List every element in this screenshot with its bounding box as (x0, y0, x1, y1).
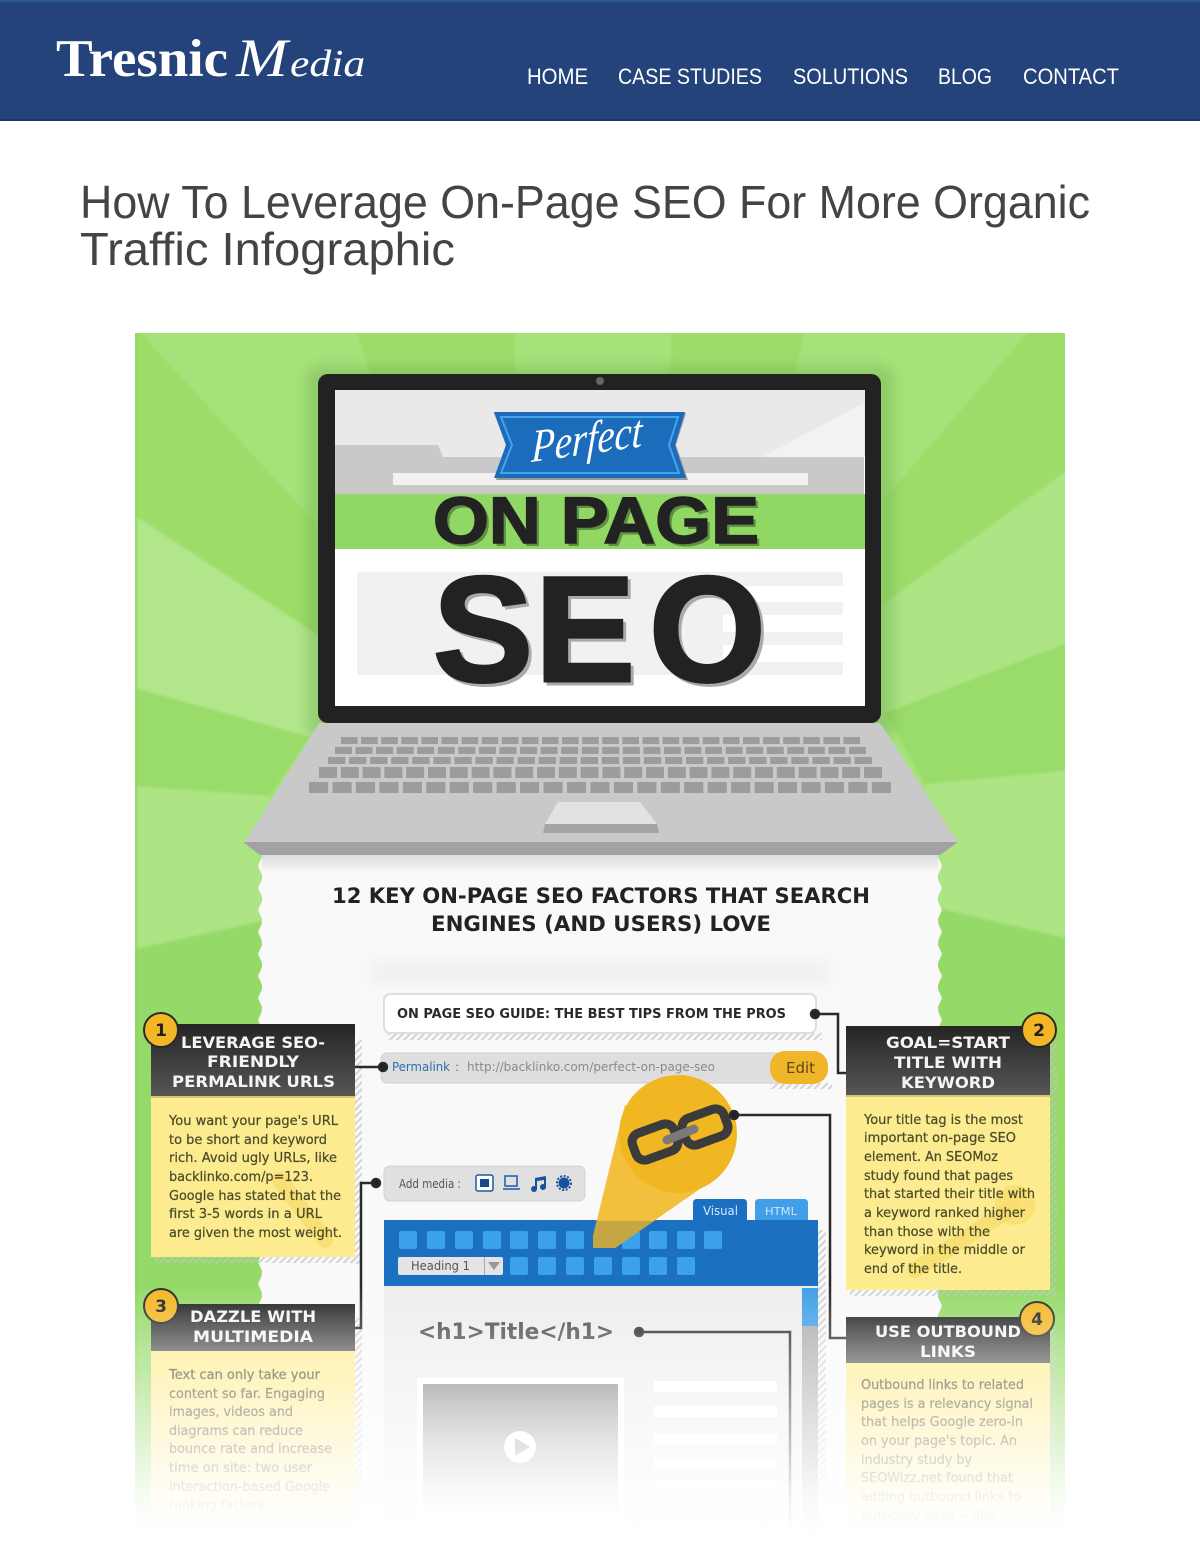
panel 3 body: Text can only take your (168, 1367, 320, 1383)
navigation menu (527, 64, 1119, 89)
ribbon: Perfect: Perfect (530, 406, 644, 473)
badge 1 (144, 1013, 178, 1047)
navigation menu: CONTACT (1023, 64, 1119, 89)
badge 3: 3 (155, 1297, 167, 1317)
bezel (318, 374, 881, 723)
panel 1 body (168, 1113, 342, 1241)
panel 4 body: industry study by (861, 1452, 972, 1468)
panel 3 body (168, 1367, 332, 1513)
page title: How To Leverage On-Page SEO For More Organic (80, 176, 1090, 228)
page title (80, 176, 1090, 275)
panel 4 body: authority sites -- like (861, 1508, 995, 1524)
editor tabs: HTML (765, 1205, 798, 1218)
laptop (243, 374, 958, 855)
panel 2 heading: KEYWORD (901, 1073, 995, 1092)
navigation menu: SOLUTIONS (793, 64, 908, 89)
panel 3 body: interaction-based Google (169, 1479, 330, 1495)
panel 2 body: Your title tag is the most (863, 1112, 1023, 1128)
toolbar buttons (399, 1231, 722, 1275)
edit button: Edit (786, 1059, 815, 1077)
heading: ON PAGE: ON PAGE (433, 483, 759, 557)
panel 4 heading (875, 1322, 1021, 1361)
panel 3 heading: MULTIMEDIA (193, 1327, 314, 1346)
connector lines (355, 1010, 846, 1540)
panel 1 body: are given the most weight. (169, 1225, 342, 1241)
screen (335, 390, 865, 706)
icon: image (476, 1175, 493, 1191)
panel 4 body (861, 1377, 1033, 1542)
panel 3 body: diagrams can reduce (169, 1423, 303, 1439)
panel 2: title keyword (846, 1013, 1056, 1290)
site header bar (0, 0, 1200, 121)
edit button (770, 1051, 828, 1084)
heading: ON PAGE: ON PAGE (436, 486, 762, 560)
logo: Media (235, 28, 365, 88)
permalink bar: : (455, 1060, 459, 1074)
panel 2 body: that started their title with (864, 1186, 1035, 1202)
panel 1 body: first 3-5 words in a URL (169, 1206, 322, 1222)
panel 2 body (863, 1112, 1035, 1277)
heading: ON PAGE (435, 496, 760, 546)
badge 2 (1022, 1013, 1056, 1047)
panel 1 heading: LEVERAGE SEO- (181, 1033, 325, 1052)
panel 3 heading: DAZZLE WITH (190, 1307, 316, 1326)
h1 sample: <h1>Title</h1> (418, 1320, 614, 1345)
infographic (135, 325, 1075, 1552)
navigation menu: CASE STUDIES (618, 64, 762, 89)
panel 2 body: study found that pages (864, 1168, 1013, 1184)
badge 4 (1020, 1302, 1054, 1336)
panel 4 body: Harvard.edu and (861, 1526, 968, 1542)
editor tabs (693, 1199, 808, 1221)
blog title field: ON PAGE SEO GUIDE: THE BEST TIPS FROM THE PROS (397, 1007, 786, 1022)
permalink bar: Permalink (392, 1060, 450, 1074)
bottom white fade (130, 1285, 1070, 1552)
hatch shadows (155, 1033, 1057, 1483)
badge 2: 2 (1033, 1021, 1045, 1041)
panel 1 body: rich. Avoid ugly URLs, like (169, 1150, 337, 1166)
panel 4 heading: LINKS (920, 1342, 976, 1361)
panel 2 body: end of the title. (864, 1261, 962, 1277)
panel 3 heading (190, 1307, 316, 1346)
panel 2 body: a keyword ranked higher (864, 1205, 1025, 1221)
panel 4 body: SEOWizz.net found that (861, 1470, 1013, 1486)
panel 4 body: pages is a relevancy signal (861, 1396, 1033, 1412)
subtitle (334, 887, 868, 934)
laptop shadow (306, 366, 894, 738)
subtitle: ENGINES (AND USERS) LOVE (431, 912, 771, 936)
navigation menu: BLOG (938, 64, 992, 89)
add media bar: Add media : (399, 1176, 461, 1191)
panel 2 body: keyword in the middle or (864, 1242, 1025, 1258)
add media bar (384, 1166, 585, 1201)
panel 3 body: time on site: two user (169, 1460, 312, 1476)
icon: music (531, 1176, 546, 1192)
panel 1 body: to be short and keyword (169, 1132, 327, 1148)
heading: SEO: SEO (433, 545, 766, 713)
logo (56, 28, 365, 88)
panel 4 body: that helps Google zero-in (861, 1414, 1023, 1430)
keyboard (309, 740, 891, 788)
icon: gear (557, 1176, 571, 1190)
video placeholder (417, 1378, 624, 1476)
trackpad (545, 802, 657, 824)
blog title field (384, 994, 816, 1033)
panel 3 body: bounce rate and increase (169, 1441, 332, 1457)
ribbon: Perfect (494, 406, 688, 480)
permalink bar (381, 1051, 828, 1084)
heading dropdown (398, 1257, 503, 1275)
panel 3 body: ranking factors. (169, 1497, 268, 1513)
panel 4 heading: USE OUTBOUND (875, 1322, 1021, 1341)
panel 2 body: element. An SEOMoz (864, 1149, 998, 1165)
panel 2 body: than those with the (864, 1224, 990, 1240)
panel 4: outbound links (846, 1302, 1054, 1542)
panel 3 body: content so far. Engaging (169, 1386, 325, 1402)
navigation menu: HOME (527, 64, 588, 89)
heading dropdown: Heading 1 (411, 1259, 470, 1273)
permalink bar: http://backlinko.com/perfect-on-page-seo (467, 1060, 715, 1074)
subtitle: 12 KEY ON-PAGE SEO FACTORS THAT SEARCH (332, 884, 870, 908)
page title: Traffic Infographic (80, 223, 455, 275)
link pin callout (593, 1075, 737, 1248)
sunburst background (135, 325, 1075, 1540)
panel 1 body: backlinko.com/p=123. (169, 1169, 313, 1185)
panel 1 body: Google has stated that the (169, 1188, 341, 1204)
panel 1 heading: FRIENDLY (207, 1052, 299, 1071)
panel 2 heading: GOAL=START (886, 1033, 1010, 1052)
editor body (384, 1286, 818, 1488)
heading: SEO: SEO (436, 548, 769, 716)
scrollbar (802, 1326, 818, 1484)
panel 4 body: adding outbound links to (861, 1489, 1021, 1505)
paper sheet (257, 855, 943, 1552)
panel 1: permalink URLs (144, 1013, 355, 1257)
icon: video (503, 1176, 520, 1189)
panel 3: multimedia (144, 1289, 355, 1541)
badge 1: 1 (155, 1021, 167, 1041)
panel 1 heading (174, 1036, 334, 1087)
badge 4: 4 (1031, 1310, 1043, 1330)
panel 4 body: on your page's topic. An (861, 1433, 1017, 1449)
editor tabs: Visual (703, 1204, 738, 1218)
panel 2 heading: TITLE WITH (894, 1053, 1002, 1072)
editor toolbar (384, 1199, 818, 1286)
panel 2 body: important on-page SEO (864, 1130, 1016, 1146)
text line placeholders (654, 1381, 777, 1392)
panel 4 body: Outbound links to related (861, 1377, 1024, 1393)
heading: SEO (436, 574, 764, 687)
badge 3 (144, 1289, 178, 1323)
logo: Tresnic (56, 30, 228, 88)
panel 2 heading (886, 1033, 1010, 1092)
panel 1 body: You want your page's URL (168, 1113, 338, 1129)
icon: chain link (630, 1106, 730, 1163)
laptop base (245, 723, 958, 842)
panel 1 heading: PERMALINK URLS (172, 1072, 335, 1091)
panel 3 body: images, videos and (169, 1404, 293, 1420)
